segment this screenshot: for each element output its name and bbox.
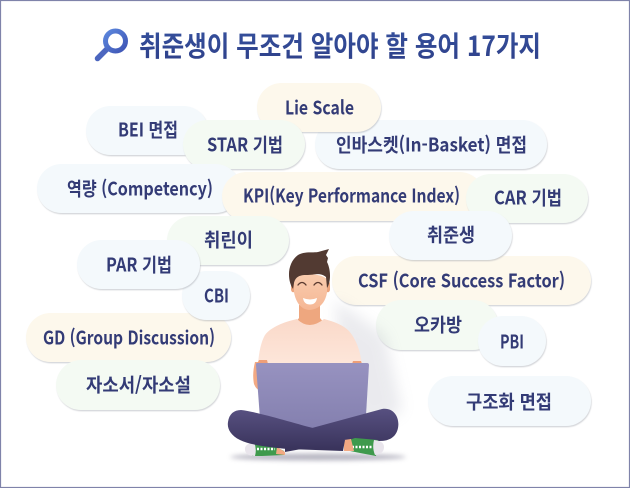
pill: 오카방: 오카방	[414, 310, 462, 338]
pill: PBI: PBI	[500, 328, 524, 354]
pill: CAR 기법: CAR 기법	[494, 184, 562, 210]
head	[293, 274, 328, 310]
pill: CBI: CBI	[204, 282, 229, 308]
pill: 취린이	[167, 216, 289, 265]
pill: STAR 기법	[183, 120, 305, 169]
neck	[294, 305, 325, 328]
hair	[289, 249, 330, 289]
ground shadow	[230, 454, 406, 460]
pill: 구조화 면접: 구조화 면접	[466, 388, 552, 414]
pill: 취준생: 취준생	[427, 220, 475, 248]
pill: PBI	[478, 316, 546, 366]
eyes and smile	[298, 282, 322, 304]
pill: CSF: CSF (Core Success Factor)	[358, 266, 565, 294]
ears	[291, 282, 330, 292]
pill: GD	[26, 313, 231, 362]
pill: CSF	[332, 256, 591, 305]
pill: Lie Scale	[257, 83, 381, 132]
pill: 인바스켓: 인바스켓(In-Basket) 면접	[336, 130, 527, 158]
pill: 자소서/자소설: 자소서/자소설	[86, 370, 191, 398]
pill: Lie Scale: Lie Scale	[285, 94, 354, 120]
left arm	[253, 362, 259, 390]
pill: 자소서/자소설	[56, 360, 220, 410]
pill: GD: GD (Group Discussion)	[43, 324, 215, 350]
pill: PAR 기법: PAR 기법	[106, 250, 172, 278]
back leg	[285, 409, 398, 452]
pill: 역량	[37, 164, 240, 213]
pill: 취준생	[389, 211, 512, 260]
t-shirt	[258, 319, 362, 364]
pill: BEI 면접: BEI 면접	[118, 116, 178, 142]
pill: 역량: 역량 (Competency)	[67, 174, 213, 202]
left shoe	[245, 442, 284, 456]
laptop	[256, 363, 369, 432]
pill: STAR 기법: STAR 기법	[207, 130, 283, 158]
pill: PAR 기법	[77, 240, 200, 289]
right shoe	[346, 438, 384, 456]
pill: CBI	[182, 271, 250, 320]
illustration: man with laptop	[228, 249, 406, 460]
title text: 취준생이 무조건 알아야 할 용어 17가지	[139, 25, 541, 65]
right ankle	[344, 439, 354, 451]
icon: magnifier	[98, 31, 126, 58]
pill: 취린이: 취린이	[204, 226, 253, 252]
pill: KPI	[222, 172, 484, 221]
front leg	[228, 410, 345, 451]
left ankle	[276, 447, 285, 455]
pill: KPI: KPI(Key Performance Index)	[243, 182, 460, 208]
arm cuffs	[257, 360, 362, 364]
soft shadow on right side of figure	[335, 300, 402, 430]
pill: CAR 기법	[466, 174, 588, 223]
pill: 구조화 면접	[428, 376, 591, 426]
pill: 오카방	[376, 300, 498, 350]
title with magnifier icon	[98, 25, 541, 65]
pill: 인바스켓	[315, 120, 547, 169]
pill: BEI 면접	[86, 106, 208, 155]
